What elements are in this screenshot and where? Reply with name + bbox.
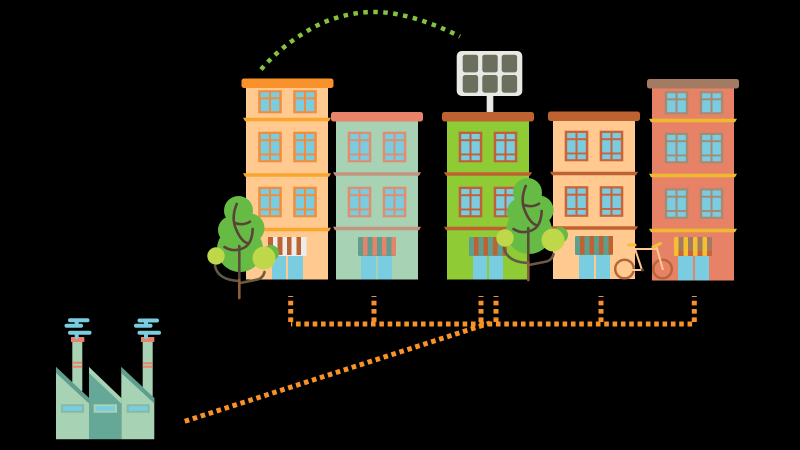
factory [56,320,159,439]
green dotted arc [261,12,460,70]
roof [331,112,423,122]
building 4: peach [548,112,640,279]
sawtooth halls [56,367,154,439]
awning [469,237,507,256]
tree left [207,196,279,298]
chimneys [71,337,154,401]
roof [242,78,334,88]
factory windows [61,404,150,413]
building 3: bright green [442,112,534,280]
awning [674,237,712,256]
roof [647,79,739,88]
roof [442,112,534,122]
doors [678,256,709,280]
awning [268,237,306,256]
building 5: coral tower [647,79,739,280]
bicycle [615,244,672,278]
awning [358,237,396,256]
diagonal supply line [185,323,490,421]
building 2: green-grey [331,112,423,280]
doors [361,256,392,280]
doors [473,256,503,280]
doors [272,256,303,280]
awning [575,236,613,255]
orange dotted network [185,296,694,421]
smoke [66,320,159,337]
tree right [496,178,568,280]
solar panel [457,51,522,113]
roof [548,112,640,121]
building 1: peach tower [242,78,334,280]
doors [579,255,610,279]
